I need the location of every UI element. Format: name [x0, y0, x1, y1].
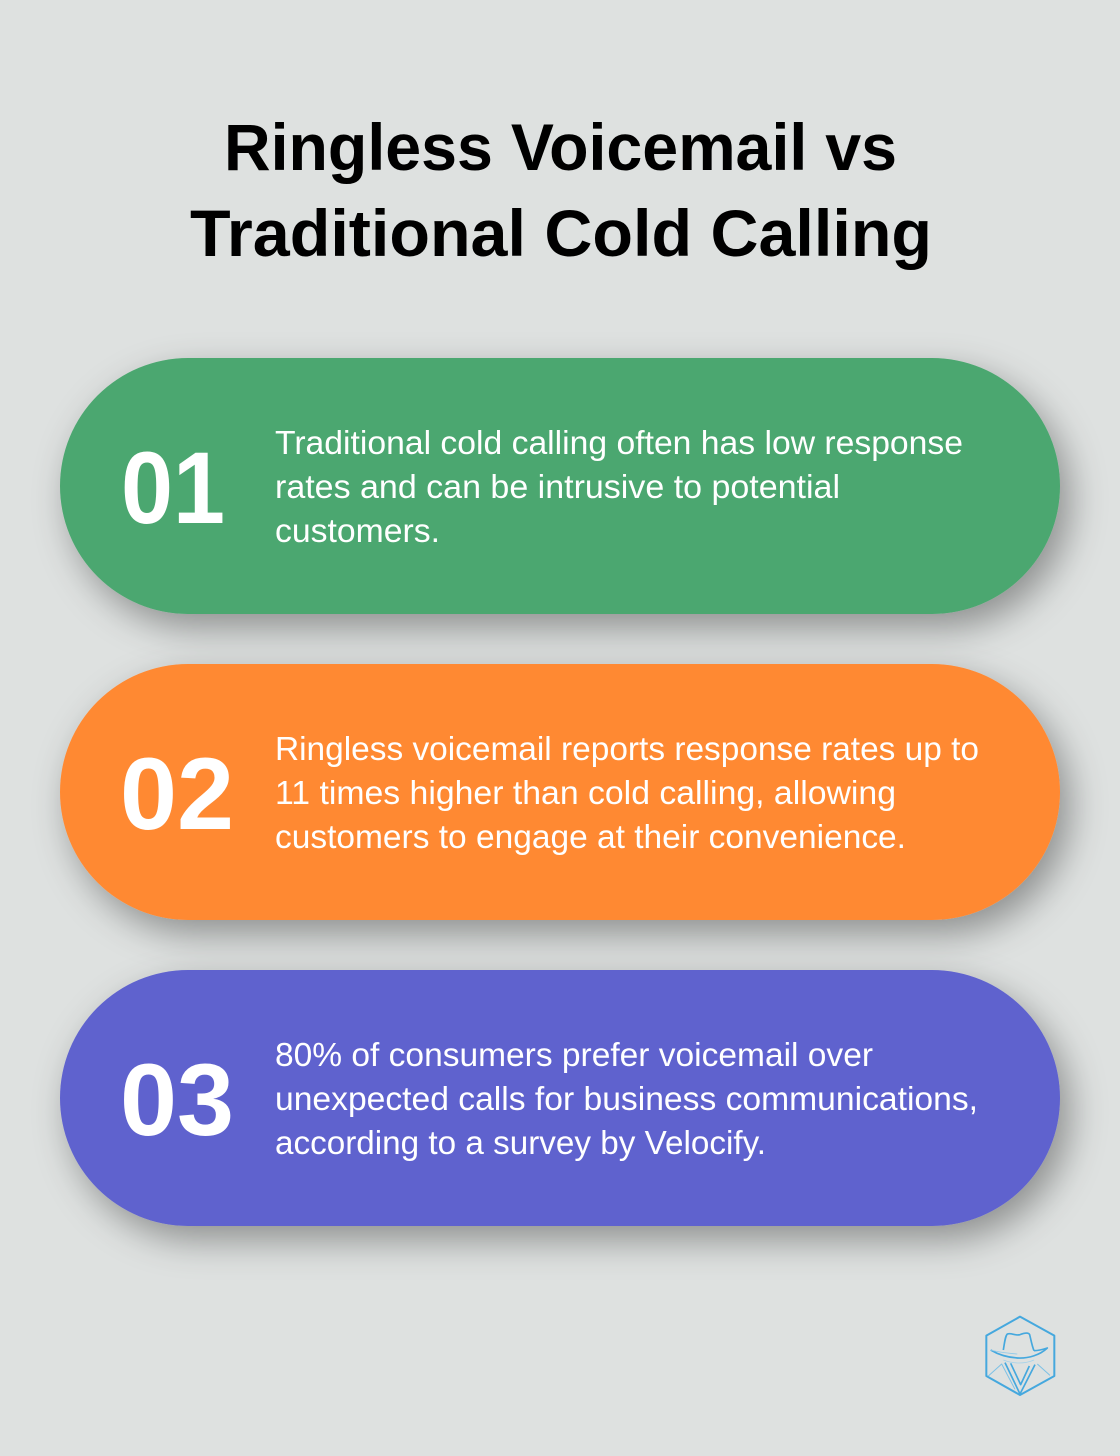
card 01 background pill [60, 358, 1060, 614]
card 01 text: Traditional cold calling often has low response [275, 424, 963, 461]
panel: card 01 [60, 358, 1060, 614]
card 03 text: 80% of consumers prefer voicemail over [275, 1036, 873, 1073]
panel: card 03 [60, 970, 1060, 1226]
card 03 text: unexpected calls for business communications, [275, 1080, 978, 1117]
card 01 number: 01 [121, 431, 225, 545]
title: Ringless Voicemail vs [224, 110, 897, 184]
card 01 text [275, 424, 963, 549]
card 03 text [275, 1036, 978, 1161]
card 02 text [275, 730, 979, 855]
card 02 text: 11 times higher than cold calling, allowing [275, 774, 896, 811]
card 02 background pill [60, 664, 1060, 920]
card 02 number: 02 [120, 737, 234, 851]
card 03 background pill [60, 970, 1060, 1226]
title [190, 110, 932, 270]
panel: card 02 [60, 664, 1060, 920]
card 02 text: customers to engage at their convenience. [275, 818, 906, 855]
icon: spy logo [986, 1317, 1054, 1395]
card 01 text: rates and can be intrusive to potential [275, 468, 840, 505]
card 02 text: Ringless voicemail reports response rates up to [275, 730, 979, 767]
card 03 number: 03 [120, 1043, 234, 1157]
card 01 text: customers. [275, 512, 440, 549]
card 03 text: according to a survey by Velocify. [275, 1124, 766, 1161]
title: Traditional Cold Calling [190, 196, 932, 270]
